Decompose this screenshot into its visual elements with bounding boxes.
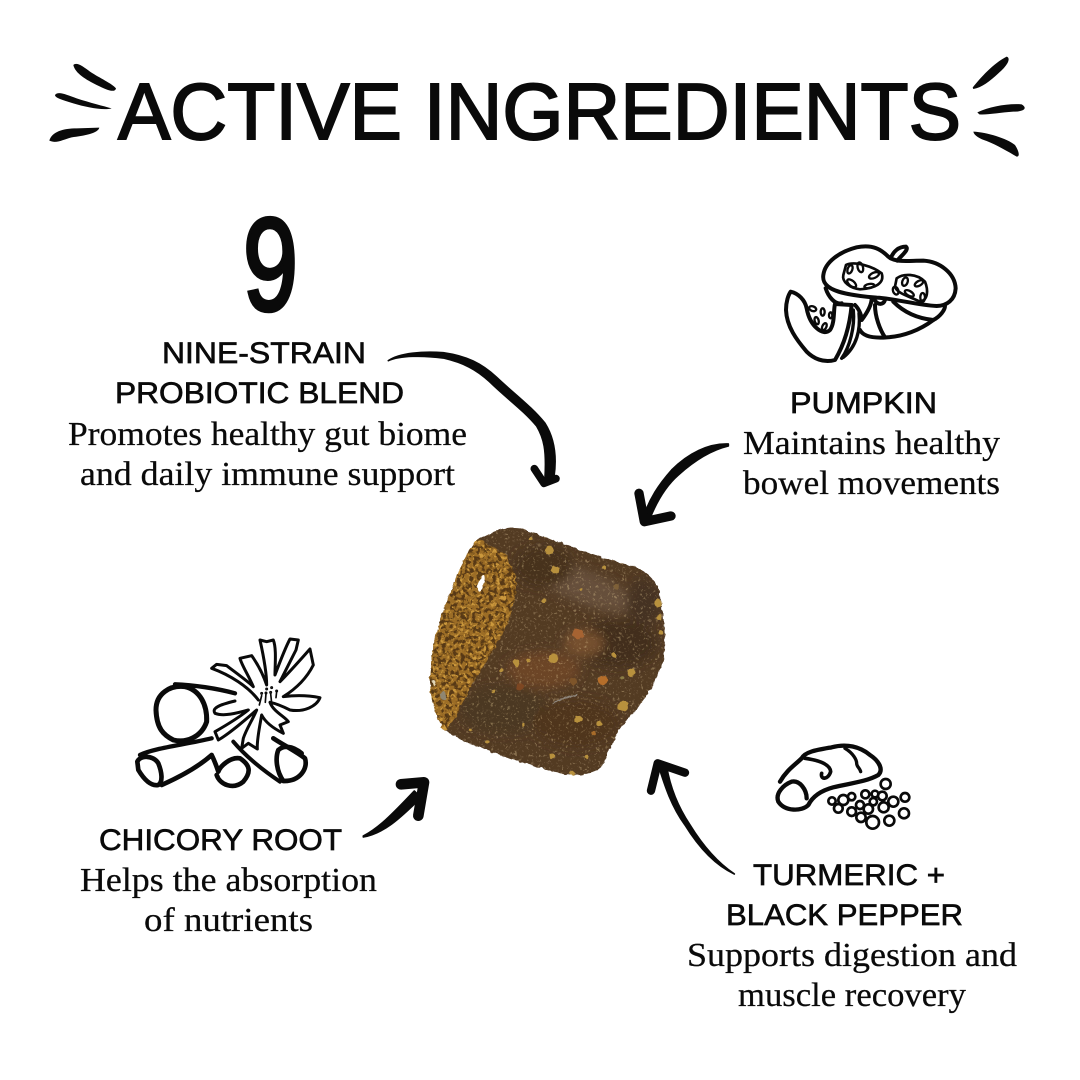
heading: turmeric + black pepper (726, 859, 963, 932)
heading: chicory root: CHICORY ROOT (99, 824, 342, 857)
icon: right emphasis rays (973, 57, 1025, 157)
crumb face of the chew (423, 538, 516, 733)
title (49, 57, 1025, 157)
heading: turmeric + black pepper: BLACK PEPPER (726, 899, 963, 932)
bare spots on the chew (432, 574, 577, 703)
description: probiotic: Promotes healthy gut biome (68, 416, 467, 453)
icon: turmeric and peppercorns (778, 746, 909, 829)
highlights on the chew (469, 537, 663, 776)
heading: pumpkin: PUMPKIN (790, 387, 937, 420)
heading: nine-strain probiotic blend: PROBIOTIC BLEND (115, 377, 404, 410)
description: pumpkin: bowel movements (743, 465, 1000, 502)
description: pumpkin (743, 425, 1000, 502)
title text: ACTIVE INGREDIENTS (118, 67, 961, 156)
arrow: probiotic to chew (388, 352, 556, 483)
panel: turmeric and black pepper (687, 746, 1017, 1014)
arrow: turmeric to chew (651, 763, 734, 874)
description: probiotic (68, 416, 467, 493)
heading: nine-strain probiotic blend: NINE-STRAIN (162, 337, 366, 370)
heading: nine-strain probiotic blend (115, 337, 404, 410)
panel: chicory root (80, 639, 377, 939)
icon: chicory root and flower (137, 639, 320, 786)
description: probiotic: and daily immune support (80, 456, 456, 493)
icon: pumpkin (786, 246, 956, 361)
description: turmeric + black pepper (687, 937, 1017, 1014)
product photo: soft chew (428, 528, 666, 776)
heading: turmeric + black pepper: TURMERIC + (753, 859, 945, 892)
description: chicory root: of nutrients (144, 902, 313, 939)
panel: nine-strain probiotic blend (68, 191, 467, 493)
description: chicory root: Helps the absorption (80, 862, 377, 899)
description: turmeric + black pepper: Supports digestion and (687, 937, 1017, 974)
icon: number nine: 9 (243, 191, 298, 338)
description: pumpkin: Maintains healthy (743, 425, 1000, 462)
arrow: chicory root to chew (363, 782, 424, 837)
description: turmeric + black pepper: muscle recovery (738, 977, 966, 1014)
description: chicory root (80, 862, 377, 939)
panel: pumpkin (743, 246, 1000, 502)
icon: left emphasis rays (49, 64, 116, 142)
arrow: pumpkin to chew (639, 444, 728, 522)
